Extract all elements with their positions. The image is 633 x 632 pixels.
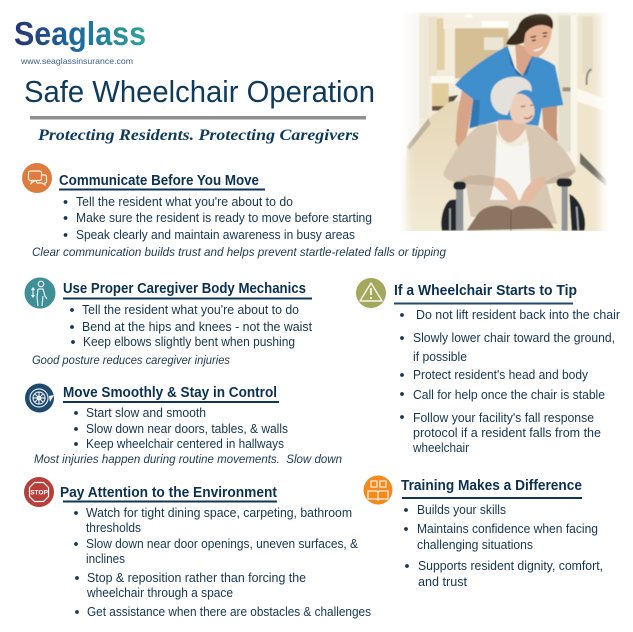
bullet list [404, 503, 603, 589]
heading: Move Smoothly & Stay in Control [63, 385, 277, 401]
bullet list: Builds your skills [417, 503, 506, 517]
bullet list: Start slow and smooth [86, 406, 206, 420]
title: Safe Wheelchair Operation [24, 74, 375, 109]
nurse scrubs [455, 46, 563, 128]
section: Move Smoothly & Stay in Control [25, 384, 342, 466]
icon: stop sign: STOP [30, 490, 48, 496]
icon: wheel [25, 384, 54, 412]
bullet list [70, 303, 312, 349]
bullet list: Get assistance when there are obstacles & challenges [87, 605, 371, 619]
note: Good posture reduces caregiver injuries [32, 353, 230, 367]
section: Pay Attention to the Environment [24, 477, 371, 619]
bullet list: Slow down near doors, tables, & walls [86, 422, 288, 436]
heading: If a Wheelchair Starts to Tip [394, 283, 577, 299]
bullet list: Do not lift resident back into the chair [416, 308, 621, 322]
bullet list: Bend at the hips and knees - not the waist [82, 320, 312, 334]
icon: stop sign [24, 477, 54, 507]
heading: Use Proper Caregiver Body Mechanics [63, 281, 306, 297]
icon: speech bubbles [22, 163, 52, 193]
bullet list: and trust [418, 575, 467, 589]
logo: Seaglass: Seaglass [14, 15, 146, 52]
bullet list: if possible [413, 350, 467, 364]
icon: warning triangle [356, 278, 386, 308]
resident hair [491, 77, 532, 115]
bullet list [64, 195, 372, 242]
resident neck [498, 120, 526, 143]
bullet list: inclines [86, 552, 125, 566]
subtitle: Protecting Residents. Protecting Caregivers [37, 127, 359, 144]
bullet list: wheelchair through a space [86, 586, 233, 600]
bullet list: Slowly lower chair toward the ground, [413, 331, 615, 345]
resident face [510, 94, 535, 124]
bullet list: Speak clearly and maintain awareness in busy areas [76, 228, 355, 242]
resident pants [467, 206, 554, 231]
photo: nurse pushing resident in wheelchair [400, 10, 613, 233]
bullet list: Protect resident's head and body [413, 368, 589, 382]
section: If a Wheelchair Starts to Tip [356, 278, 621, 455]
bullet list: Tell the resident what you're about to do [76, 195, 293, 209]
bullet list: challenging situations [417, 538, 533, 552]
bullet list: Keep wheelchair centered in hallways [86, 437, 284, 451]
bullet list: Watch for tight dining space, carpeting, bathroom [86, 506, 352, 520]
bullet list: Make sure the resident is ready to move before starting [76, 211, 372, 225]
bullet list: protocol if a resident falls from the [413, 426, 601, 440]
section: Training Makes a Difference [364, 476, 603, 589]
bullet list: Slow down near door openings, uneven surfaces, & [86, 537, 358, 551]
bullet list: Supports resident dignity, comfort, [418, 559, 603, 573]
note: Clear communication builds trust and helps prevent startle-related falls or tipping [32, 245, 446, 259]
heading: Pay Attention to the Environment [60, 485, 277, 501]
bullet list [400, 308, 621, 455]
nurse neck [514, 44, 532, 76]
note: Most injuries happen during routine movements. Slow down [34, 452, 342, 466]
logo: Seaglass [14, 15, 146, 66]
bullet list [74, 406, 288, 451]
bullet list: Tell the resident what you're about to do [82, 303, 299, 317]
nurse hair [506, 14, 553, 45]
nurse arms [455, 91, 474, 147]
bullet list: Maintains confidence when facing [417, 522, 598, 536]
section: Communicate Before You Move [22, 163, 446, 259]
logo: Seaglass: www.seaglassinsurance.com [20, 56, 133, 66]
icon: person with posture arrow [24, 278, 56, 308]
bullet list [74, 506, 371, 619]
heading: Training Makes a Difference [401, 478, 582, 494]
wheelchair [441, 199, 456, 231]
nurse face [524, 25, 552, 57]
bullet list: Follow your facility's fall response [413, 411, 594, 425]
icon: open book [364, 476, 392, 504]
bullet list: wheelchair [412, 441, 470, 455]
resident hands [493, 178, 519, 205]
resident cardigan [443, 123, 576, 224]
section: Use Proper Caregiver Body Mechanics [24, 278, 312, 367]
bullet list: Stop & reposition rather than forcing the [87, 571, 306, 585]
bullet list: Call for help once the chair is stable [413, 388, 605, 402]
bullet list: Keep elbows slightly bent when pushing [83, 335, 295, 349]
resident shirt [490, 133, 532, 200]
bullet list: thresholds [86, 521, 141, 535]
heading: Communicate Before You Move [59, 173, 259, 189]
